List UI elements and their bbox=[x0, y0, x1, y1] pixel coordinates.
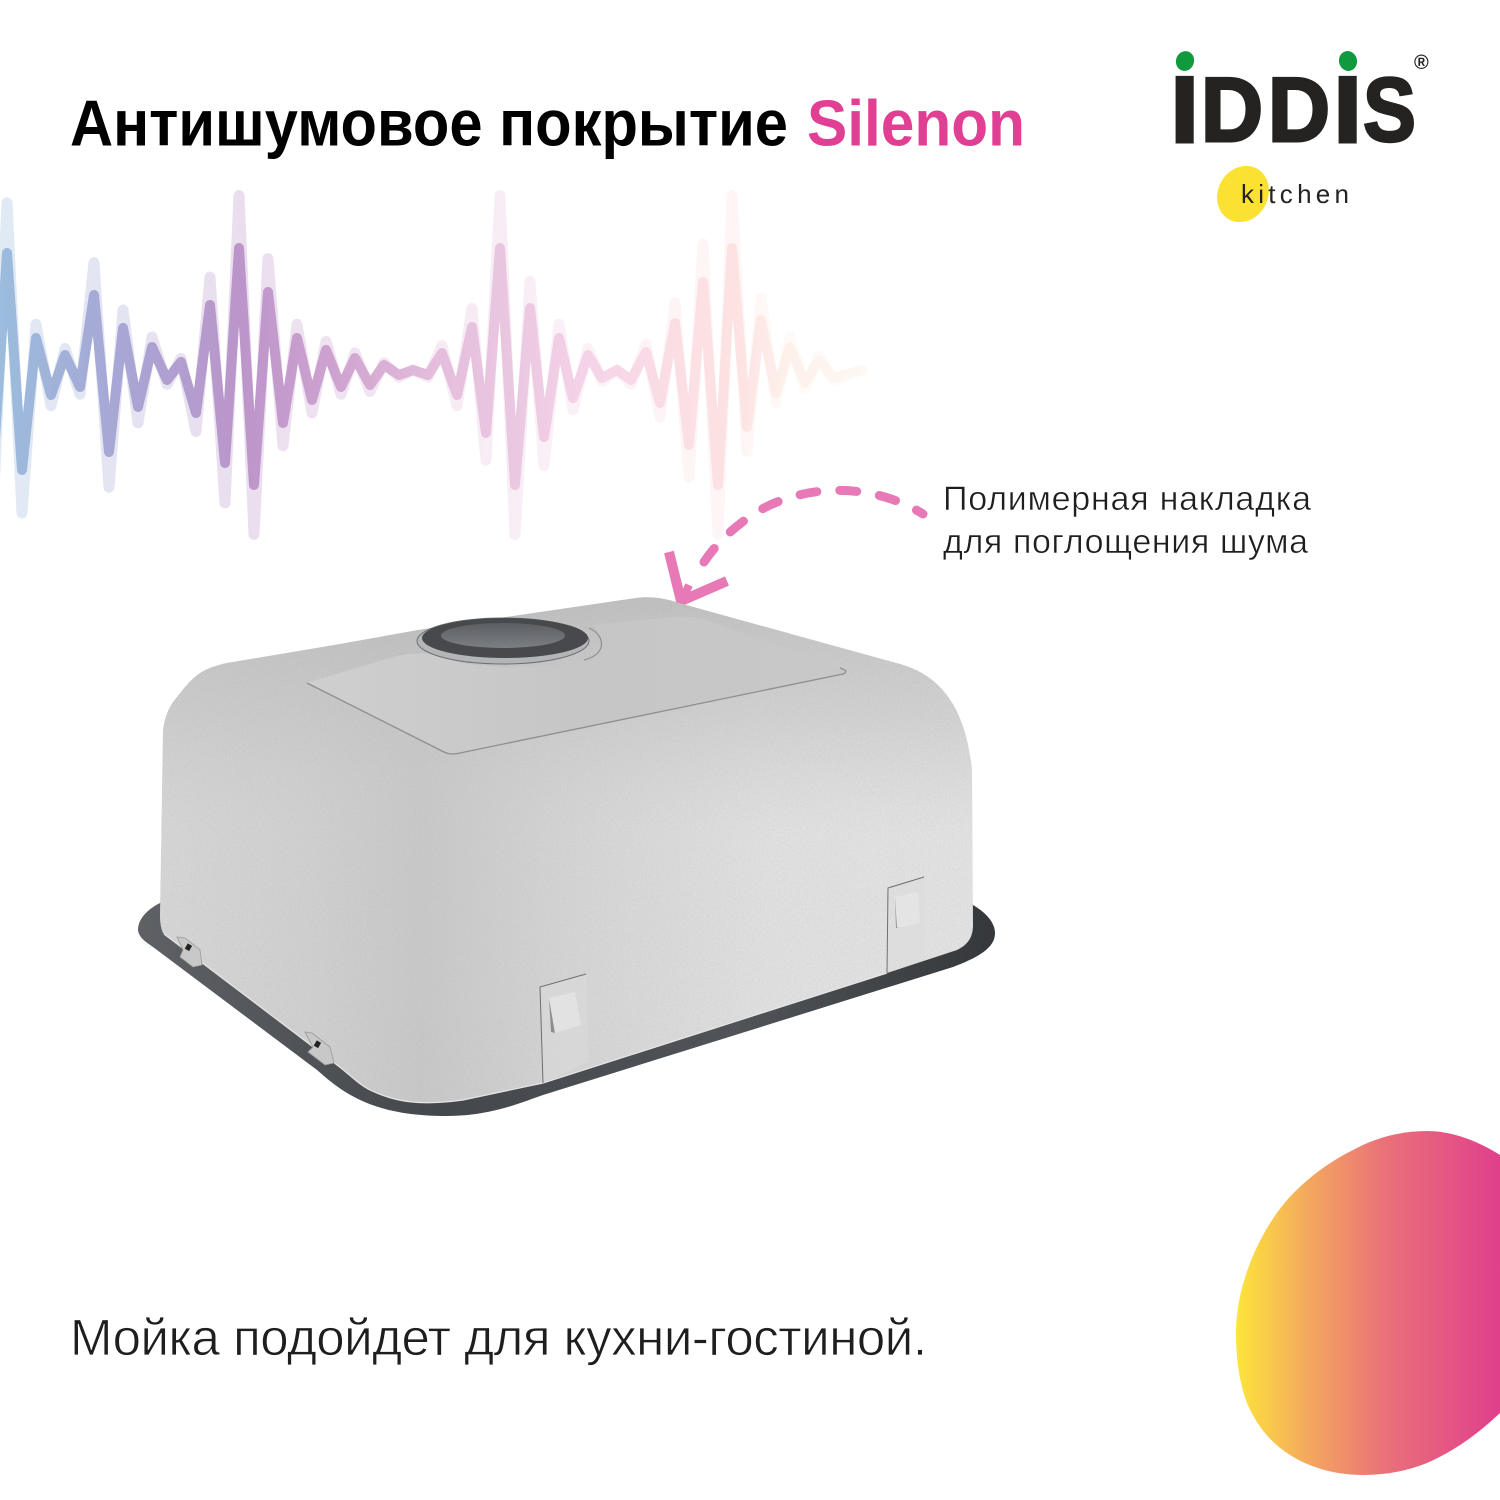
clip left 2 bbox=[305, 1032, 334, 1065]
dashed arrow bbox=[669, 490, 923, 601]
bottom caption: Мойка подойдет для кухни-гостиной. bbox=[70, 1309, 927, 1366]
title: Антишумовое покрытие bbox=[70, 86, 788, 160]
clip left 1 bbox=[177, 937, 202, 967]
sink body bbox=[160, 597, 973, 1103]
drain bbox=[417, 618, 602, 664]
sound wave bbox=[0, 196, 862, 534]
logo: IDDIS kitchen: D bbox=[1268, 60, 1330, 161]
body shading bbox=[163, 597, 972, 766]
title: Silenon bbox=[807, 86, 1025, 160]
logo: IDDIS kitchen: I bbox=[1335, 60, 1360, 161]
callout text: для поглощения шума bbox=[943, 523, 1308, 561]
logo: IDDIS kitchen: ® bbox=[1414, 52, 1429, 74]
tab 1 bbox=[540, 974, 589, 1083]
logo: IDDIS kitchen: D bbox=[1201, 60, 1263, 161]
sink flange bbox=[138, 880, 995, 1116]
body texture bbox=[720, 738, 972, 1016]
logo: IDDIS kitchen: kitchen bbox=[1241, 179, 1349, 209]
sink bbox=[138, 590, 995, 1116]
logo: IDDIS kitchen: I bbox=[1172, 60, 1197, 161]
gradient blob bbox=[1236, 1131, 1500, 1475]
callout text bbox=[943, 480, 1311, 561]
polymer pad bbox=[307, 617, 846, 754]
bottom edge highlight bbox=[164, 934, 887, 1103]
logo: IDDIS kitchen bbox=[1172, 49, 1429, 231]
tab 2 bbox=[887, 877, 925, 973]
callout text: Полимерная накладка bbox=[943, 480, 1311, 518]
logo: IDDIS kitchen: S bbox=[1363, 60, 1416, 161]
